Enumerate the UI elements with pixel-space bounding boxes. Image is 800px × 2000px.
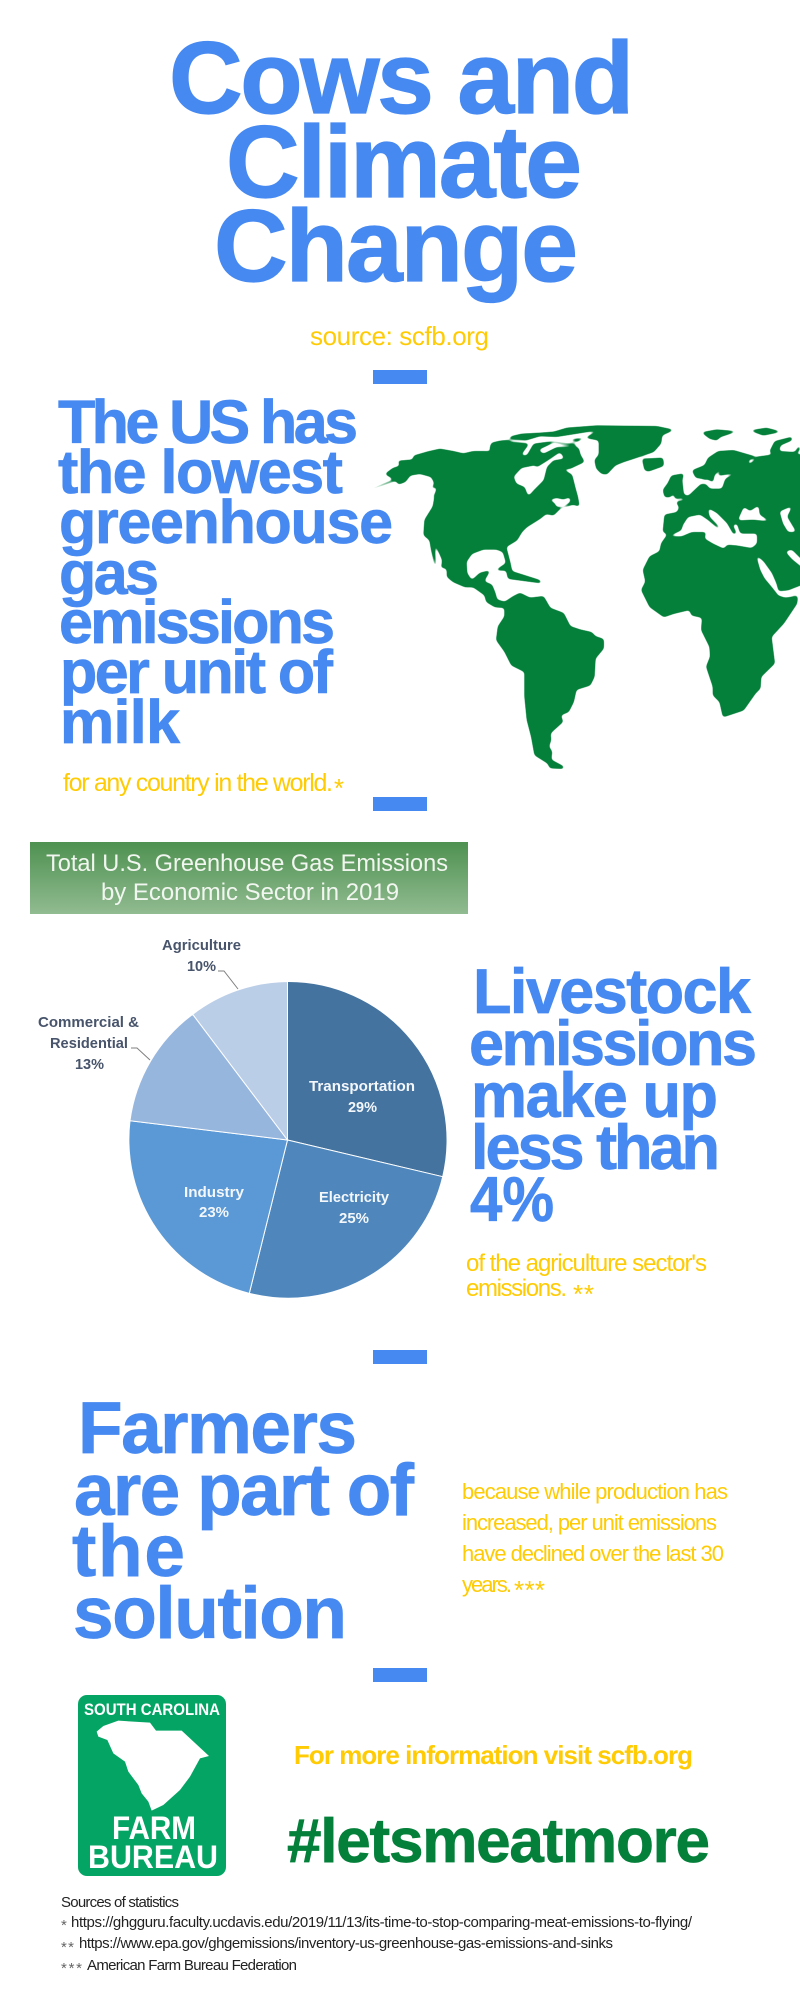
heading: farmers: are part of	[74, 1450, 415, 1531]
heading: the US has the lowest: emissions	[59, 588, 335, 656]
heading: farmers: the	[72, 1511, 185, 1592]
heading: farmers: solution	[73, 1573, 347, 1654]
heading: livestock emissions: less than	[471, 1113, 720, 1183]
subtext: agriculture sector: of the agriculture sector's	[466, 1250, 707, 1277]
subtext: agriculture sector: emissions.	[466, 1275, 567, 1302]
label: agriculture	[162, 937, 241, 989]
call to action: For more information visit scfb.org	[294, 1740, 693, 1770]
title: Climate	[226, 105, 582, 219]
divider bar 1	[373, 370, 427, 384]
heading: the US has the lowest: greenhouse	[59, 488, 393, 556]
slice: industry	[129, 1121, 288, 1293]
world map	[333, 393, 800, 793]
heading: the US has the lowest: per unit of	[60, 638, 334, 706]
map: Iceland	[643, 458, 663, 471]
label: industry: 23%	[199, 1204, 229, 1221]
subtext: agriculture sector: **	[573, 1279, 594, 1309]
subtext: production and emissions	[462, 1479, 728, 1605]
divider bar 2	[373, 797, 427, 811]
chart header: Total U.S. Greenhouse Gas Emissions	[46, 850, 448, 877]
label: commercial and residential: Commercial &	[38, 1014, 139, 1031]
map: inland seas	[670, 458, 800, 597]
heading: farmers: Farmers	[78, 1388, 357, 1469]
slice: transportation	[288, 981, 447, 1177]
map: Americas	[363, 426, 673, 768]
logo: South Carolina Farm Bureau	[78, 1695, 226, 1876]
label: industry	[184, 1184, 245, 1221]
label: commercial and residential	[38, 1014, 150, 1073]
logo: South Carolina Farm Bureau: BUREAU	[88, 1839, 218, 1875]
label: transportation: Transportation	[309, 1078, 415, 1095]
sources of statistics	[61, 1894, 693, 1977]
sources of statistics: American Farm Bureau Federation	[87, 1957, 297, 1974]
label: commercial and residential: 13%	[75, 1056, 104, 1073]
label: electricity: 25%	[339, 1210, 369, 1227]
subtext: any country: *	[334, 773, 344, 803]
heading: livestock emissions: emissions	[469, 1009, 757, 1079]
heading: livestock emissions	[469, 957, 757, 1235]
heading: the US has the lowest: milk	[60, 688, 180, 756]
label: agriculture: Agriculture	[162, 937, 241, 954]
title	[169, 21, 634, 303]
subtext: production and emissions: years.	[462, 1572, 512, 1597]
icon: South Carolina state outline	[97, 1721, 209, 1811]
heading: the US has the lowest: the lowest	[58, 438, 343, 506]
title: Cows and	[169, 21, 634, 135]
sources of statistics: *	[61, 1917, 67, 1934]
subtext: agriculture sector	[466, 1250, 707, 1309]
heading: farmers	[72, 1388, 415, 1654]
slice: electricity	[249, 1140, 443, 1298]
map: Eurasia and Africa	[642, 451, 800, 717]
source line: source: scfb.org	[310, 321, 489, 351]
map: Hudson Bay and Arctic channels	[430, 431, 597, 567]
heading: the US has the lowest	[58, 388, 393, 756]
subtext: production and emissions: ***	[514, 1575, 545, 1605]
label: agriculture: 10%	[187, 958, 216, 975]
label: industry: Industry	[184, 1184, 245, 1201]
sources of statistics: https://ghgguru.faculty.ucdavis.edu/2019/11/13/its-time-to-stop-comparing-meat-emissions-to-flying/	[71, 1914, 693, 1931]
title: Change	[214, 189, 578, 303]
heading: livestock emissions: Livestock	[473, 957, 752, 1027]
chart header	[30, 842, 468, 914]
slice: commercial and residential	[130, 1014, 288, 1140]
label: transportation: 29%	[348, 1099, 377, 1116]
subtext: production and emissions: have declined over the last 30	[462, 1541, 724, 1566]
panel: farmers are part of the solution	[72, 1388, 728, 1654]
heading: the US has the lowest: The US has	[58, 388, 358, 456]
hashtag: #letsmeatmore	[287, 1807, 710, 1876]
heading: livestock emissions: make up	[471, 1061, 718, 1131]
sources of statistics: https://www.epa.gov/ghgemissions/inventory-us-greenhouse-gas-emissions-and-sinks	[79, 1935, 613, 1952]
pie chart	[38, 937, 447, 1298]
sources of statistics: **	[61, 1939, 74, 1956]
map: Arctic islands	[703, 430, 735, 440]
label: electricity	[319, 1189, 390, 1227]
label: commercial and residential: Residential	[50, 1035, 128, 1052]
divider bar 4	[373, 1668, 427, 1682]
divider bar 3	[373, 1350, 427, 1364]
logo: South Carolina Farm Bureau: FARM	[112, 1810, 196, 1846]
heading: livestock emissions: 4%	[470, 1165, 554, 1235]
sources of statistics: ***	[61, 1960, 82, 1977]
subtext: production and emissions: because while production has	[462, 1479, 728, 1504]
logo: South Carolina Farm Bureau: SOUTH CAROLINA	[84, 1700, 220, 1719]
subtext: production and emissions: increased, per unit emissions	[462, 1510, 717, 1535]
chart header: by Economic Sector in 2019	[101, 879, 399, 906]
panel: livestock emissions statement	[466, 957, 757, 1309]
slice: agriculture	[193, 982, 288, 1140]
label: transportation	[309, 1078, 415, 1116]
panel: lowest emissions statement	[58, 388, 393, 803]
subtext: any country: for any country in the world.	[63, 769, 333, 797]
sources of statistics: Sources of statistics	[61, 1894, 179, 1911]
heading: the US has the lowest: gas	[59, 539, 159, 607]
label: electricity: Electricity	[319, 1189, 390, 1206]
